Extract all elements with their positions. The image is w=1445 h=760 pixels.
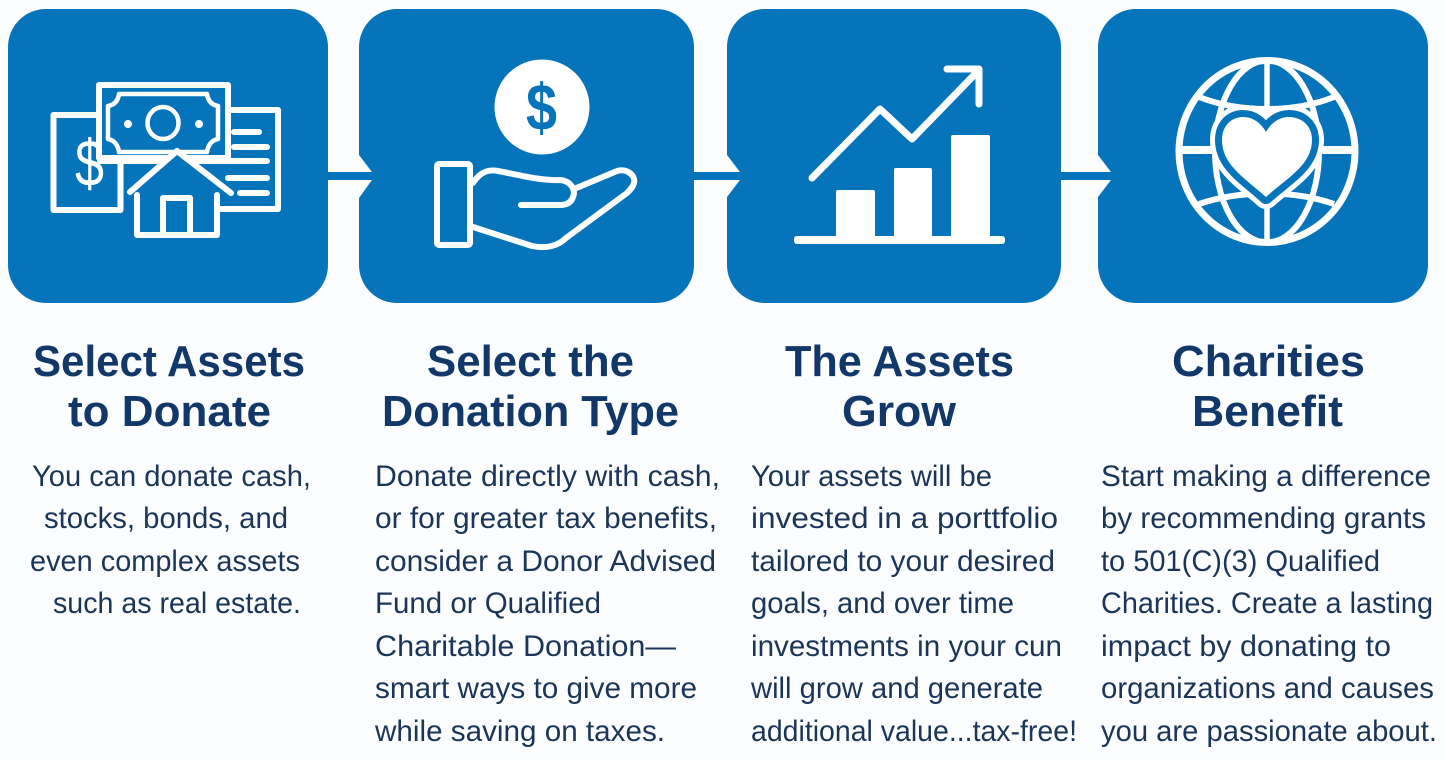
text block: step 1 description [30,460,311,620]
text block: step 2 description: Charitable Donation— [375,630,676,663]
icon: globe with heart [1178,60,1356,243]
text block: step 4 description: Start making a difference [1101,460,1431,493]
connector: step 2 to step 3 [692,172,742,180]
panel: step 3 assets grow [727,9,1061,303]
text block: step 2 description: while saving on taxes. [374,715,665,748]
panel: step 2 donation type [359,9,694,303]
text block: step 1 description: even complex assets [30,545,300,578]
text block: step 2 description: smart ways to give more [375,672,697,705]
text block: step 2 description: consider a Donor Advised [375,545,716,578]
heading: charities benefit: Charities [1172,337,1365,386]
text block: step 2 description: Donate directly with cash, [375,460,720,493]
text block: step 3 description: goals, and over time [751,587,1014,620]
text block: step 1 description: You can donate cash, [32,460,311,493]
icon: growth chart with arrow [794,69,1005,244]
heading: charities benefit: Benefit [1192,387,1343,436]
heading: select the donation type: Donation Type [382,387,679,436]
text block: step 3 description: invested in a porttfolio [751,502,1058,535]
icon: cash, document and house: $ [75,126,104,200]
icon: hand holding coin: $ [526,70,557,144]
heading: select the donation type: Select the [427,337,634,386]
icon: cash, document and house [54,85,278,236]
heading: charities benefit [1172,337,1365,436]
text block: step 3 description: investments in your cun [751,630,1062,663]
text block: step 4 description: organizations and causes [1101,672,1434,705]
card: step 2 [359,9,694,303]
text block: step 1 description: stocks, bonds, and [44,502,288,535]
panel: step 1 select assets [8,9,328,303]
card: step 4 [1098,9,1428,303]
text block: step 4 description: by recommending grants [1101,502,1426,535]
text block: step 2 description: or for greater tax benefits, [375,502,717,535]
text block: step 1 description: such as real estate. [53,587,301,620]
card: step 1 [8,9,328,303]
text block: step 3 description [750,460,1077,748]
heading: select assets to donate: to Donate [68,387,271,436]
heading: select assets to donate: Select Assets [33,337,305,386]
text block: step 4 description: Charities. Create a lasting [1101,587,1433,620]
text block: step 4 description: to 501(C)(3) Qualified [1101,545,1380,578]
panel: step 4 charities benefit [1098,9,1428,303]
heading: select assets to donate [33,337,305,436]
text block: step 4 description: impact by donating to [1101,630,1391,663]
text block: step 4 description [1101,460,1437,748]
text block: step 3 description: additional value...tax-free! [751,715,1077,748]
text block: step 4 description: you are passionate about. [1101,715,1437,748]
text block: step 2 description [374,460,720,748]
card: step 3 [727,9,1061,303]
icon: hand holding coin [437,60,634,247]
heading: select the donation type [382,337,679,436]
text block: step 2 description: Fund or Qualified [375,587,601,620]
text block: step 3 description: Your assets will be [751,460,992,493]
text block: step 3 description: will grow and generate [750,672,1043,705]
text block: step 3 description: tailored to your desired [751,545,1055,578]
heading: the assets grow: Grow [842,387,957,436]
heading: the assets grow [785,337,1014,436]
connector: step 3 to step 4 [1059,172,1111,180]
heading: the assets grow: The Assets [785,337,1014,386]
connector: step 1 to step 2 [326,172,374,180]
